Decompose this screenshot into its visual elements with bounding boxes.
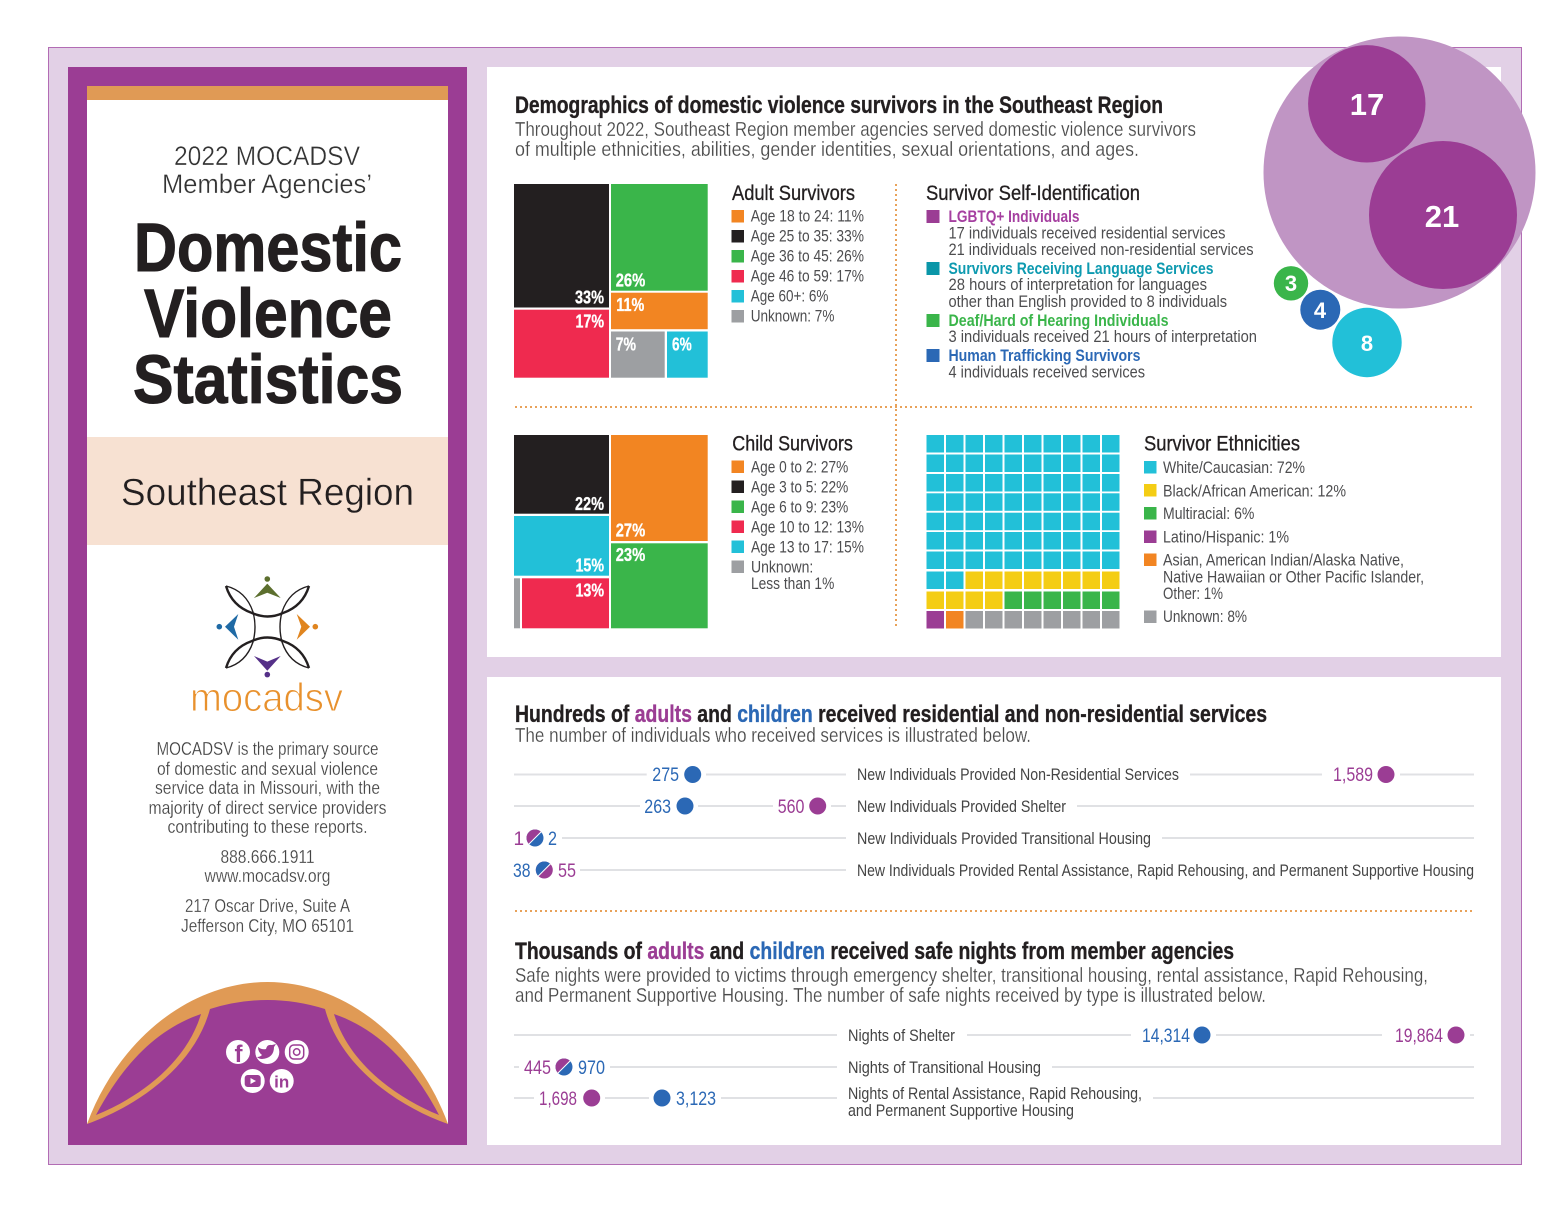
legend: adult survivors: Age 46 to 59: 17% bbox=[751, 268, 864, 286]
heading: demographics: Demographics of domestic violence survivors in the Southeast Region bbox=[515, 92, 1163, 119]
self-identification list: 17 individuals received residential services bbox=[948, 224, 1226, 242]
intro text: of multiple ethnicities, abilities, gender identities, sexual orientations, and ages. bbox=[515, 139, 1139, 161]
icons: social media: in bbox=[274, 1072, 289, 1092]
bubble chart: self-identification counts: 17 bbox=[1350, 87, 1384, 122]
self-identification list: 21 individuals received non-residential services bbox=[948, 241, 1254, 259]
about text: contributing to these reports. bbox=[168, 817, 368, 837]
legend: ethnicities bbox=[1144, 433, 1424, 626]
self-identification list: Deaf/Hard of Hearing Individuals bbox=[948, 312, 1168, 330]
legend: child survivors: Age 10 to 12: 13% bbox=[751, 519, 864, 537]
self-identification list: 28 hours of interpretation for languages bbox=[948, 276, 1207, 294]
treemap: child survivors: 23% bbox=[616, 545, 645, 565]
legend: adult survivors: Age 25 to 35: 33% bbox=[751, 228, 864, 246]
dot plot: safe nights: 19,864 bbox=[1395, 1026, 1443, 1047]
sidebar subtitle bbox=[162, 141, 372, 199]
dot plot: safe nights: Nights of Rental Assistance, Rapid Rehousing, bbox=[848, 1085, 1142, 1103]
dot plot: safe nights: Nights of Shelter bbox=[848, 1027, 955, 1045]
self-identification list: 4 individuals received services bbox=[948, 364, 1145, 382]
dot plot: individuals served: New Individuals Provided Transitional Housing bbox=[857, 830, 1151, 848]
treemap: adult survivors: 6% bbox=[672, 334, 692, 354]
contact details: www.mocadsv.org bbox=[204, 866, 330, 886]
sidebar subtitle: 2022 MOCADSV bbox=[174, 141, 360, 171]
self-identification list bbox=[926, 182, 1257, 382]
bubble chart: self-identification counts bbox=[1264, 36, 1536, 377]
legend: ethnicities: Asian, American Indian/Alaska Native, bbox=[1163, 552, 1404, 570]
legend: child survivors: Age 3 to 5: 22% bbox=[751, 479, 849, 497]
self-identification list: 3 individuals received 21 hours of interpretation bbox=[948, 328, 1257, 346]
legend: ethnicities: Black/African American: 12% bbox=[1163, 483, 1346, 501]
about text: majority of direct service providers bbox=[148, 798, 386, 818]
legend: ethnicities: Unknown: 8% bbox=[1163, 608, 1247, 626]
legend: ethnicities: Other: 1% bbox=[1163, 585, 1223, 603]
sidebar title bbox=[133, 209, 403, 418]
panel: demographics bbox=[487, 67, 1501, 657]
treemap: child survivors: 15% bbox=[576, 556, 604, 576]
legend: child survivors: Child Survivors bbox=[732, 433, 853, 456]
icon: mocadsv logo bbox=[190, 576, 343, 720]
treemap: adult survivors bbox=[514, 184, 708, 378]
treemap: adult survivors: 11% bbox=[616, 295, 644, 315]
bubble chart: self-identification counts: 4 bbox=[1314, 298, 1327, 323]
icon: mocadsv logo: mocadsv bbox=[190, 676, 343, 720]
intro text: Throughout 2022, Southeast Region member agencies served domestic violence survivors bbox=[515, 119, 1196, 141]
treemap: child survivors: 22% bbox=[575, 494, 604, 514]
region banner: Southeast Region bbox=[121, 472, 414, 514]
treemap: adult survivors: 33% bbox=[575, 287, 604, 307]
heading: residential services: Hundreds of adults and children received residential and non-residential services bbox=[515, 701, 1267, 728]
dot plot: safe nights: and Permanent Supportive Housing bbox=[848, 1102, 1074, 1120]
legend: adult survivors: Age 18 to 24: 11% bbox=[751, 208, 864, 226]
dome decoration bbox=[87, 982, 448, 1145]
safe nights subtitle: and Permanent Supportive Housing. The number of safe nights received by type is illustrated below. bbox=[515, 985, 1266, 1007]
dot plot: safe nights: Nights of Transitional Housing bbox=[848, 1059, 1041, 1077]
contact details: Jefferson City, MO 65101 bbox=[181, 916, 354, 936]
dot plot: safe nights: 970 bbox=[578, 1058, 605, 1079]
self-identification list: LGBTQ+ Individuals bbox=[948, 208, 1080, 226]
dot plot: individuals served: 275 bbox=[652, 765, 679, 786]
dot plot: individuals served: 55 bbox=[558, 861, 576, 882]
dot plot: individuals served: New Individuals Provided Shelter bbox=[857, 798, 1066, 816]
sidebar title: Violence bbox=[144, 275, 392, 352]
legend: adult survivors: Adult Survivors bbox=[732, 182, 855, 205]
sidebar title: Domestic bbox=[134, 209, 402, 286]
contact details: 217 Oscar Drive, Suite A bbox=[185, 896, 350, 916]
legend: adult survivors bbox=[732, 182, 864, 326]
legend: ethnicities: White/Caucasian: 72% bbox=[1163, 459, 1305, 477]
dot plot: safe nights: 14,314 bbox=[1142, 1026, 1190, 1047]
bubble chart: self-identification counts: 3 bbox=[1285, 271, 1297, 296]
icons: social media: f bbox=[234, 1041, 244, 1068]
about text: service data in Missouri, with the bbox=[155, 778, 380, 798]
legend: adult survivors: Age 60+: 6% bbox=[751, 288, 829, 306]
waffle chart: ethnicities bbox=[926, 435, 1120, 628]
legend: adult survivors: Age 36 to 45: 26% bbox=[751, 248, 864, 266]
dot plot: individuals served: 38 bbox=[513, 861, 530, 882]
contact details: 888.666.1911 bbox=[220, 847, 314, 867]
legend: child survivors: Age 0 to 2: 27% bbox=[751, 459, 849, 477]
treemap: adult survivors: 26% bbox=[616, 271, 645, 291]
bubble chart: self-identification counts: 21 bbox=[1425, 199, 1459, 234]
dot plot: individuals served: 1 bbox=[514, 829, 524, 850]
legend: ethnicities: Latino/Hispanic: 1% bbox=[1163, 528, 1289, 546]
self-identification list: other than English provided to 8 individuals bbox=[948, 293, 1227, 311]
legend: ethnicities: Native Hawaiian or Other Pacific Islander, bbox=[1163, 568, 1424, 586]
safe nights subtitle: Safe nights were provided to victims through emergency shelter, transitional housing, rental assistance, Rapid Rehousing, bbox=[515, 965, 1428, 987]
legend: child survivors bbox=[732, 433, 864, 593]
about text: of domestic and sexual violence bbox=[157, 759, 378, 779]
dot plot: individuals served: 2 bbox=[548, 829, 557, 850]
region banner bbox=[87, 437, 448, 545]
intro text bbox=[515, 119, 1196, 161]
legend: child survivors: Age 6 to 9: 23% bbox=[751, 499, 849, 517]
treemap: adult survivors: 17% bbox=[576, 312, 604, 332]
about text: MOCADSV is the primary source bbox=[156, 739, 378, 759]
dot plot: individuals served bbox=[513, 765, 1474, 882]
bubble chart: self-identification counts: 8 bbox=[1361, 331, 1373, 356]
self-identification list: Survivors Receiving Language Services bbox=[948, 260, 1214, 278]
dot plot: safe nights bbox=[514, 1026, 1474, 1120]
dot plot: safe nights: 1,698 bbox=[539, 1089, 577, 1110]
sidebar title: Statistics bbox=[133, 341, 403, 418]
contact details bbox=[181, 847, 354, 936]
safe nights subtitle bbox=[515, 965, 1428, 1007]
heading: safe nights: Thousands of adults and children received safe nights from member agencies bbox=[515, 938, 1234, 965]
panel: left sidebar bbox=[68, 67, 467, 1145]
treemap: adult survivors: 7% bbox=[616, 334, 636, 354]
about text bbox=[148, 739, 386, 837]
dot plot: individuals served: New Individuals Provided Non-Residential Services bbox=[857, 766, 1179, 784]
treemap: child survivors: 13% bbox=[576, 581, 604, 601]
self-identification list: Survivor Self-Identification bbox=[926, 182, 1140, 205]
legend: child survivors: Less than 1% bbox=[751, 575, 835, 593]
legend: ethnicities: Survivor Ethnicities bbox=[1144, 433, 1300, 456]
icons: social media bbox=[226, 1040, 309, 1093]
services subtitle: The number of individuals who received services is illustrated below. bbox=[515, 725, 1031, 747]
treemap: child survivors: 27% bbox=[616, 521, 645, 541]
self-identification list: Human Trafficking Survivors bbox=[948, 347, 1140, 365]
legend: child survivors: Unknown: bbox=[751, 559, 813, 577]
legend: adult survivors: Unknown: 7% bbox=[751, 308, 835, 326]
dot plot: safe nights: 445 bbox=[524, 1058, 551, 1079]
dot plot: individuals served: New Individuals Provided Rental Assistance, Rapid Rehousing, and Permanent Supportive Housing bbox=[857, 862, 1474, 880]
legend: child survivors: Age 13 to 17: 15% bbox=[751, 539, 864, 557]
dot plot: safe nights: 3,123 bbox=[676, 1089, 716, 1110]
dot plot: individuals served: 263 bbox=[644, 797, 671, 818]
panel: services bbox=[487, 677, 1501, 1145]
dot plot: individuals served: 1,589 bbox=[1333, 765, 1373, 786]
legend: ethnicities: Multiracial: 6% bbox=[1163, 505, 1255, 523]
treemap: child survivors bbox=[514, 435, 708, 628]
dot plot: individuals served: 560 bbox=[778, 797, 804, 818]
sidebar subtitle: Member Agencies’ bbox=[162, 169, 372, 199]
